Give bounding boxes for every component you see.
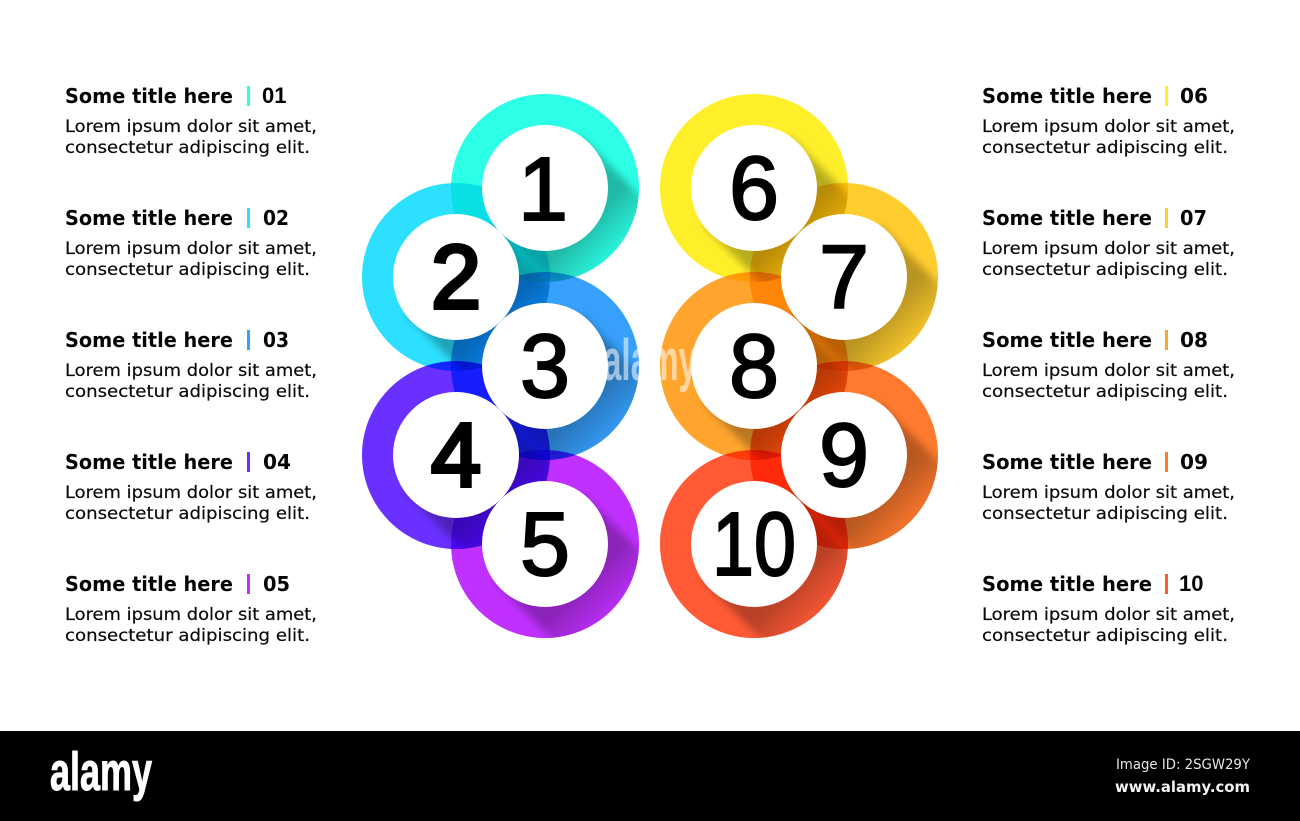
- text block 02: 02: [263, 206, 289, 230]
- left column: items 01 to 05: [65, 83, 317, 646]
- text block 10: Some title here: [982, 572, 1152, 596]
- number disc 2: 2: [431, 228, 481, 328]
- text block 02: Some title here: [65, 206, 233, 230]
- text block 02: Lorem ipsum dolor sit amet,: [65, 239, 317, 259]
- text block 01: [65, 83, 317, 158]
- footer bar: [0, 731, 1300, 821]
- right column: items 06 to 10: [982, 84, 1235, 646]
- text block 07: Some title here: [982, 206, 1152, 230]
- text block 09: Lorem ipsum dolor sit amet,: [982, 483, 1235, 503]
- text block 08: 08: [1180, 328, 1208, 352]
- text block 01: consectetur adipiscing elit.: [65, 138, 310, 158]
- text block 06: consectetur adipiscing elit.: [982, 138, 1228, 158]
- long shadows cast by the white discs: [405, 137, 968, 668]
- number disc 3: [482, 303, 608, 429]
- number disc 1: 1: [518, 140, 568, 240]
- text block 03: [65, 328, 317, 402]
- text block 04: Lorem ipsum dolor sit amet,: [65, 483, 317, 503]
- number disc 4: 4: [431, 406, 481, 506]
- number disc 10: [691, 481, 817, 607]
- text block 03: consectetur adipiscing elit.: [65, 382, 310, 402]
- text block 10: 10: [1179, 571, 1203, 596]
- text block 05: 05: [263, 572, 290, 596]
- text block 09: Some title here: [982, 450, 1152, 474]
- text block 02: consectetur adipiscing elit.: [65, 260, 310, 280]
- text block 09: 09: [1180, 450, 1208, 474]
- text block 08: Lorem ipsum dolor sit amet,: [982, 361, 1235, 381]
- text block 04: 04: [263, 450, 291, 474]
- text block 04: consectetur adipiscing elit.: [65, 504, 310, 524]
- text block 10: [982, 571, 1235, 646]
- text block 08: Some title here: [982, 328, 1152, 352]
- number disc 9: [781, 392, 907, 518]
- text block 01: Lorem ipsum dolor sit amet,: [65, 117, 317, 137]
- footer logo: alamy: [50, 742, 152, 802]
- image id: Image ID: 2SGW29Y: [1116, 757, 1250, 773]
- number disc 8: 8: [729, 317, 779, 417]
- number disc 1: [482, 125, 608, 251]
- number disc 5: 5: [520, 495, 570, 595]
- number disc 7: [781, 214, 907, 340]
- text block 10: consectetur adipiscing elit.: [982, 626, 1228, 646]
- number disc 6: [691, 125, 817, 251]
- text block 06: [982, 84, 1235, 158]
- number disc 4: [393, 392, 519, 518]
- number disc 6: 6: [729, 139, 779, 239]
- number disc 3: 3: [520, 317, 570, 417]
- text block 03: Some title here: [65, 328, 233, 352]
- number disc 9: 9: [819, 406, 869, 506]
- number disc 7: 7: [819, 228, 869, 328]
- text block 03: Lorem ipsum dolor sit amet,: [65, 361, 317, 381]
- text block 02: [65, 206, 317, 280]
- text block 06: Some title here: [982, 84, 1152, 108]
- text block 05: consectetur adipiscing elit.: [65, 626, 310, 646]
- text block 09: [982, 450, 1235, 524]
- text block 07: consectetur adipiscing elit.: [982, 260, 1228, 280]
- text block 08: [982, 328, 1235, 402]
- text block 06: Lorem ipsum dolor sit amet,: [982, 117, 1235, 137]
- text block 10: Lorem ipsum dolor sit amet,: [982, 605, 1235, 625]
- text block 01: 01: [262, 83, 286, 108]
- number disc 8: [691, 303, 817, 429]
- text block 07: Lorem ipsum dolor sit amet,: [982, 239, 1235, 259]
- website: www.alamy.com: [1115, 778, 1250, 796]
- text block 07: 07: [1180, 206, 1207, 230]
- text block 09: consectetur adipiscing elit.: [982, 504, 1228, 524]
- number disc 10: 10: [712, 495, 796, 595]
- text block 06: 06: [1180, 84, 1208, 108]
- text block 05: Some title here: [65, 572, 233, 596]
- text block 08: consectetur adipiscing elit.: [982, 382, 1228, 402]
- number disc 5: [482, 481, 608, 607]
- text block 01: Some title here: [65, 84, 233, 108]
- watermark: alamy: [603, 328, 697, 393]
- text block 05: [65, 572, 317, 646]
- text block 03: 03: [263, 328, 289, 352]
- text block 07: [982, 206, 1235, 280]
- text block 05: Lorem ipsum dolor sit amet,: [65, 605, 317, 625]
- coloured overlapping rings: [362, 94, 938, 638]
- text block 04: Some title here: [65, 450, 233, 474]
- text block 04: [65, 450, 317, 524]
- number disc 2: [393, 214, 519, 340]
